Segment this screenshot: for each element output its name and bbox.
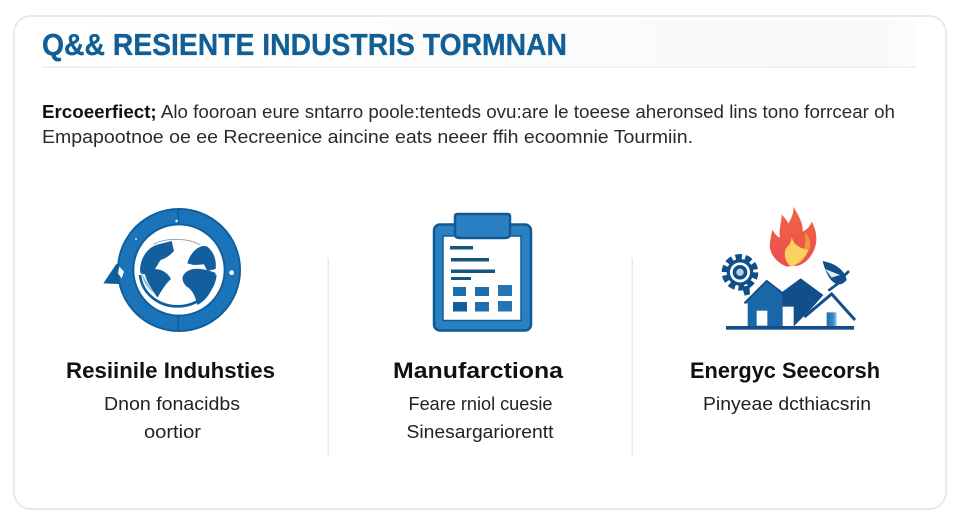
flame xyxy=(770,207,816,267)
column: manufacturing: Sinesargariorentt xyxy=(406,422,554,442)
column: manufacturing: Manufarctiona xyxy=(393,358,564,383)
icon: energy houses, gear and flame xyxy=(725,207,857,330)
column: resilient industries: Resiinile Induhsties xyxy=(66,358,275,383)
column: energy security: Pinyeae dcthiacsrin xyxy=(703,394,871,414)
column: resilient industries xyxy=(66,358,275,442)
column: manufacturing xyxy=(393,358,564,442)
icon: clipboard xyxy=(434,214,531,330)
intro text: Empapootnoe oe ee Recreenice aincine eats neeer ffih ecoomnie Tourmiin. xyxy=(42,127,693,147)
icon: globe with ring xyxy=(103,209,240,331)
column: resilient industries: oortior xyxy=(144,422,201,442)
houses xyxy=(744,278,823,327)
column: manufacturing: Feare rniol cuesie xyxy=(408,394,552,414)
column: energy security xyxy=(690,358,880,414)
divider right xyxy=(632,258,633,456)
header band xyxy=(42,20,916,68)
gear xyxy=(725,257,755,296)
satellite dish xyxy=(823,261,847,284)
column: resilient industries: Dnon fonacidbs xyxy=(104,394,240,414)
divider left xyxy=(328,258,329,456)
intro text: Ercoeerfiect; Alo fooroan eure sntarro poole:tenteds ovu:are le toeese aheronsed lins tono forrcear oh xyxy=(42,102,895,122)
intro text xyxy=(42,102,895,147)
column: energy security: Energyc Seecorsh xyxy=(690,358,880,383)
title: Q&& RESIENTE INDUSTRIS TORMNAN xyxy=(42,28,567,62)
